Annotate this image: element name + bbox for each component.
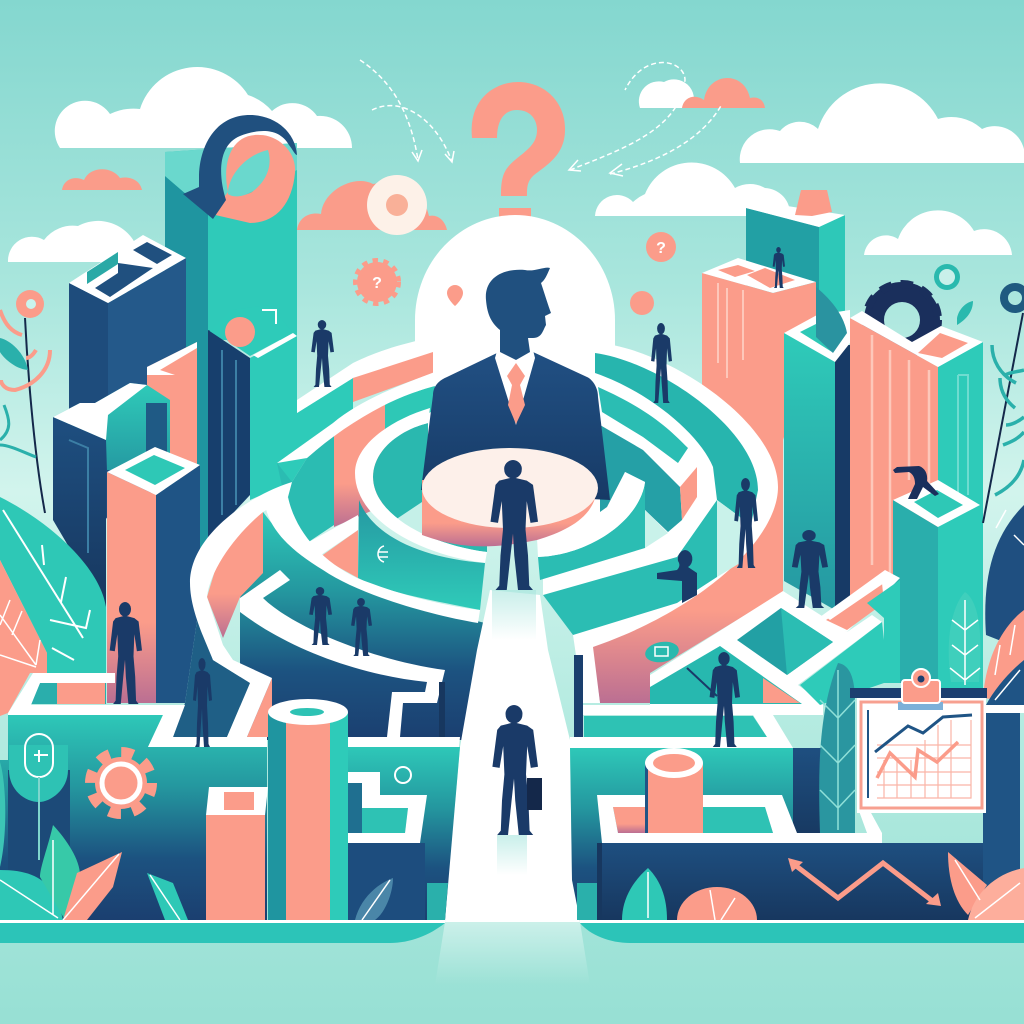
line chart board [850, 669, 987, 813]
dashed arrows [360, 60, 722, 176]
gear [866, 284, 938, 356]
coral clouds [62, 78, 765, 230]
teal rear tower [746, 190, 845, 340]
bottom right block [570, 655, 1024, 920]
silhouette leader [421, 268, 610, 500]
icon: badge [630, 291, 654, 315]
icon: coral gear question [357, 262, 397, 302]
coral band left [207, 512, 263, 638]
pale patch [717, 500, 740, 577]
band D [265, 497, 480, 623]
frame inner [31, 683, 106, 704]
teal roof with icon [212, 305, 297, 358]
wall under H [600, 425, 682, 532]
coral strip [820, 570, 900, 632]
teal top slab [584, 716, 767, 737]
floor strips [0, 920, 1024, 943]
fern right [949, 592, 980, 685]
person [110, 602, 142, 704]
white steps [570, 705, 823, 748]
wall sliver [439, 682, 445, 737]
teal icon chip [644, 639, 680, 665]
teal tall tower [784, 287, 850, 610]
person [734, 478, 758, 568]
teal band one [595, 353, 758, 530]
person: briefcase [492, 705, 542, 835]
dome [415, 215, 615, 470]
glass building [53, 383, 170, 610]
navy tower [69, 235, 186, 520]
icon: coral gear question: ? [372, 275, 382, 292]
short cylinder [645, 748, 703, 833]
maze left [173, 340, 487, 740]
center path [445, 590, 580, 922]
coral box [206, 787, 268, 920]
pale patch [395, 500, 425, 535]
coral tower [702, 258, 816, 600]
ring C [355, 408, 487, 563]
big left leaves [0, 497, 106, 716]
wall under ring C [358, 500, 485, 610]
person: center [490, 460, 538, 590]
bottom left block [0, 673, 460, 920]
people [110, 247, 939, 835]
pale patch inner [645, 510, 668, 548]
ring sculpture [183, 115, 297, 223]
icon: question badge: ? [656, 240, 666, 257]
plants left [0, 290, 50, 513]
reflection [492, 590, 536, 640]
plants right [983, 287, 1024, 650]
person: on tower [773, 247, 785, 288]
lower teal base [240, 512, 485, 740]
person: partial [657, 550, 697, 603]
person: with staff [687, 652, 740, 747]
coral wide tower [850, 311, 983, 600]
icon: question badge [646, 232, 676, 262]
teal front tower [893, 480, 983, 705]
cylinder [268, 699, 348, 920]
reflection lower [497, 835, 527, 875]
coral triangle [320, 530, 358, 578]
maze right [537, 343, 783, 703]
frame coral [57, 683, 105, 704]
right bar [348, 737, 460, 747]
person [309, 587, 332, 645]
person [651, 323, 672, 403]
teal wall [250, 333, 353, 500]
box inner [613, 807, 773, 833]
question mark [472, 82, 565, 237]
wall icon [378, 546, 388, 562]
coral sliver [680, 467, 697, 520]
band E [190, 482, 292, 737]
person [193, 658, 212, 747]
person [351, 598, 372, 656]
frame [8, 673, 267, 747]
person [311, 320, 334, 387]
clouds [8, 67, 1024, 262]
copyright icon [395, 767, 411, 783]
teal wall far right [867, 580, 900, 683]
white ring F [543, 343, 778, 703]
box outline [597, 795, 882, 843]
coral and navy leaves right [983, 610, 1024, 705]
fern leaf [819, 663, 855, 833]
dark stripes [197, 330, 250, 560]
bottom right leaves and dome [622, 852, 1024, 920]
teal plant far left [0, 762, 5, 867]
teal band three [598, 387, 688, 463]
icon: teal badge [934, 264, 973, 325]
teal wall right [800, 622, 884, 705]
bottom left leaves [0, 825, 393, 920]
lower band [240, 570, 445, 737]
band A white [297, 340, 440, 413]
wall below G [543, 500, 717, 635]
dark wall by person [173, 560, 250, 737]
icon: gear badge [367, 175, 427, 235]
central pedestal [422, 448, 598, 546]
wall under ring I [538, 482, 645, 580]
right buildings [702, 190, 983, 705]
coral band [592, 440, 783, 703]
coral lower sliver [247, 678, 272, 737]
teal tower [165, 143, 297, 540]
ring I [537, 472, 645, 557]
left buildings [53, 115, 353, 703]
connector [307, 515, 358, 557]
person: bending [893, 466, 939, 499]
wall under B [277, 385, 435, 543]
inner teal [373, 423, 487, 552]
right floor tile [650, 591, 882, 715]
capsule [8, 734, 70, 877]
band B white [277, 370, 440, 463]
gear coral [91, 753, 151, 813]
teal corner [427, 883, 448, 920]
coral strip [147, 342, 197, 480]
step outline [348, 772, 427, 843]
coral band [353, 352, 433, 402]
person [792, 530, 828, 608]
path fade [435, 922, 590, 985]
inner step wall [362, 783, 408, 833]
icon: pin [447, 285, 463, 306]
navy low [348, 843, 425, 920]
arrow down trend [788, 858, 941, 906]
coral building [107, 447, 200, 703]
